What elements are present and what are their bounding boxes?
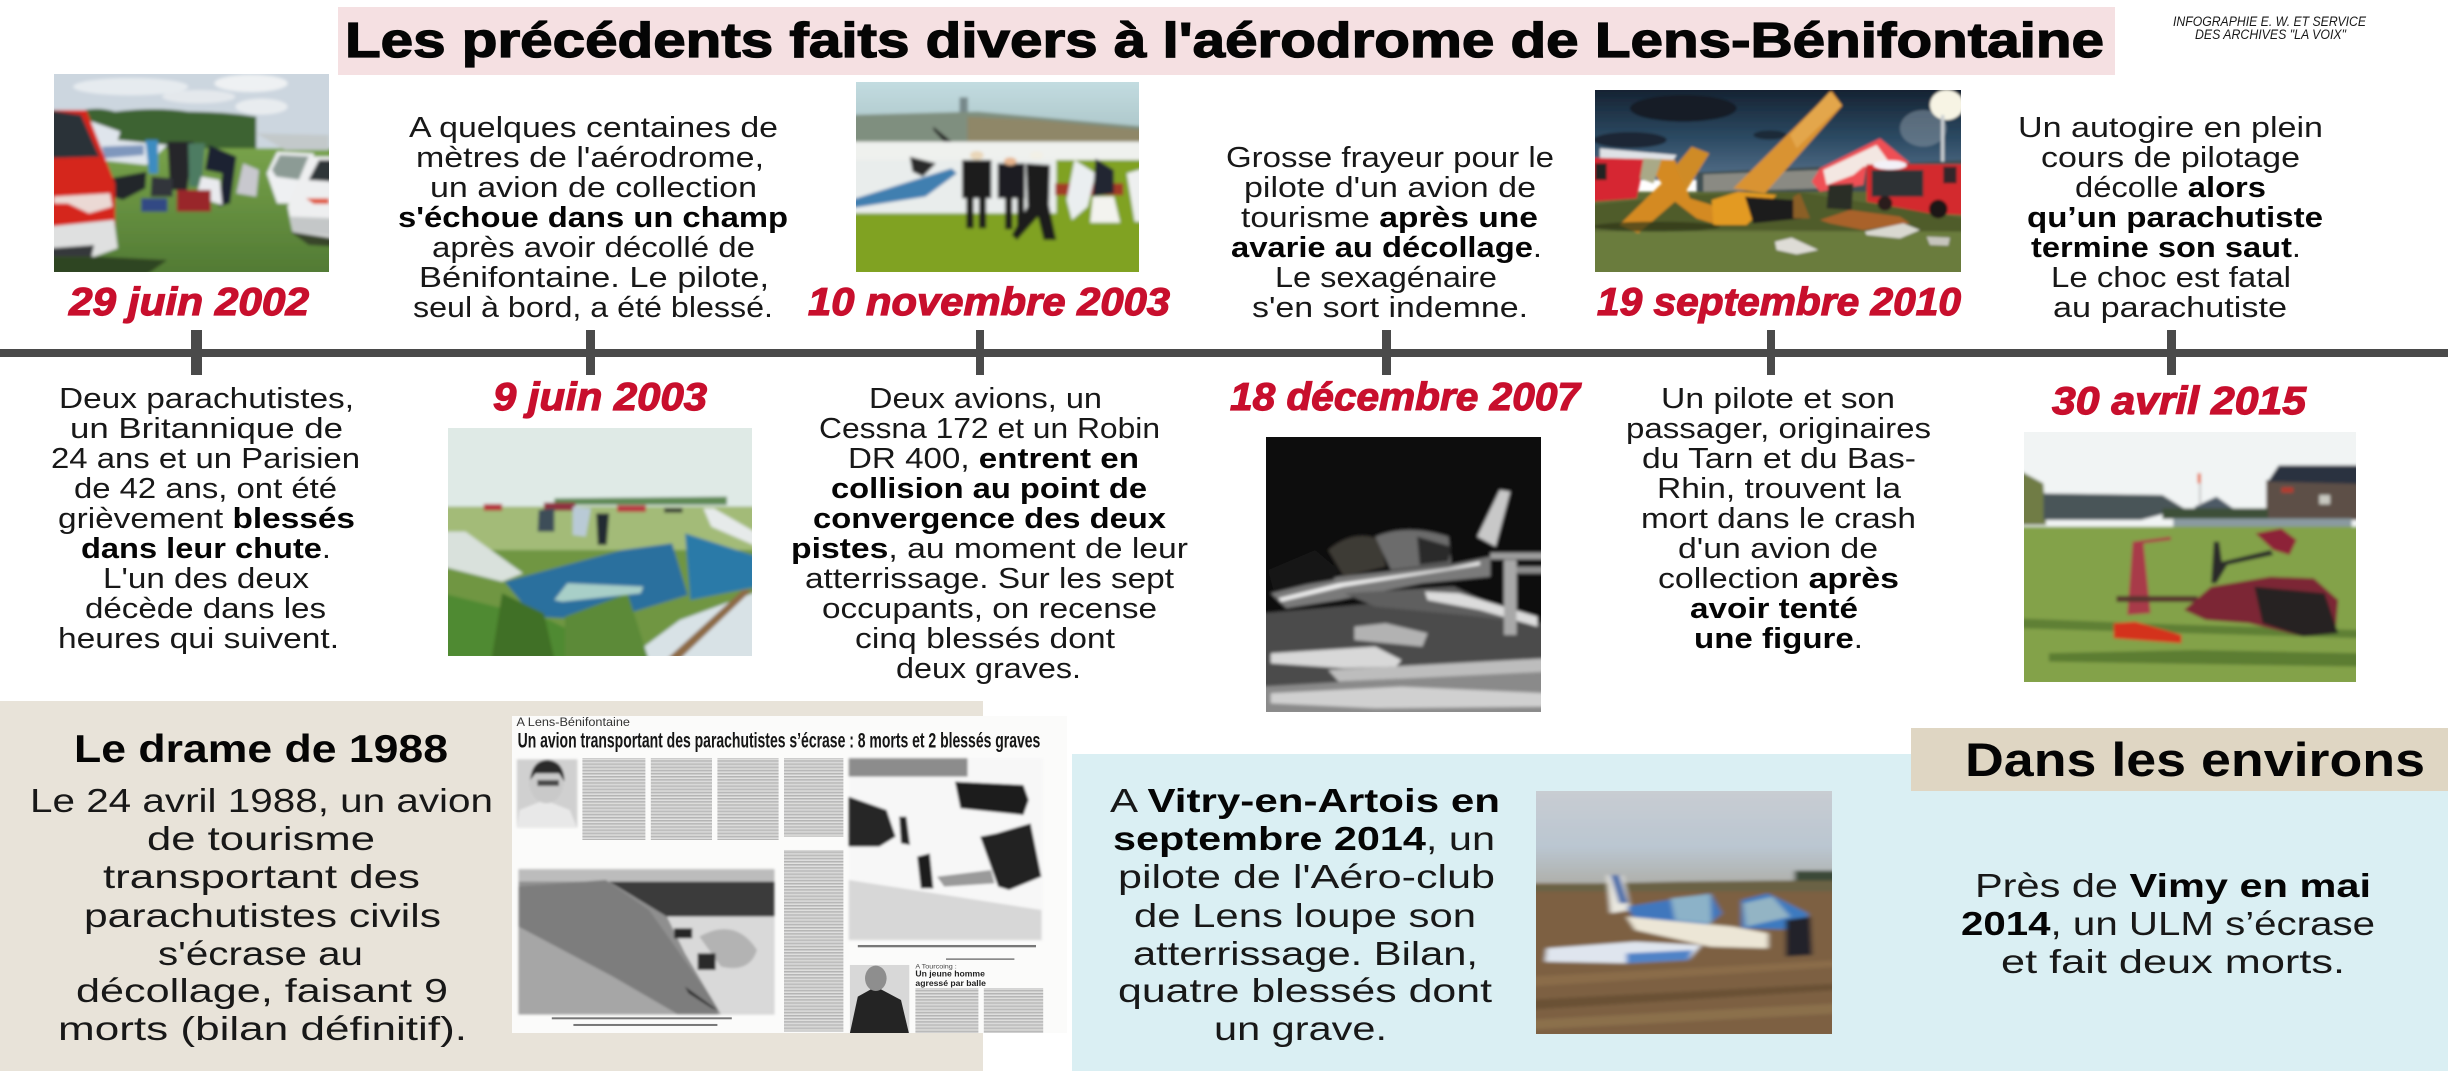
text block: crash collection: d'un avion de xyxy=(1678,533,1878,565)
heading: dans les environs: Dans les environs xyxy=(1965,733,2425,786)
text block: vitry-en-artois: septembre 2014 , un xyxy=(1113,820,1495,857)
text block: parachutistes xyxy=(51,383,360,655)
photo: 9 juin 2003 blue plane in field xyxy=(443,425,757,659)
text block: vitry-en-artois: A Vitry-en-Artois en xyxy=(1110,782,1500,819)
text block: parachutistes: 24 ans et un Parisien xyxy=(51,443,360,475)
text block: parachutistes: L'un des deux xyxy=(103,563,309,595)
text block: crash collection: du Tarn et du Bas- xyxy=(1642,443,1916,475)
text block: autogire: décolle alors xyxy=(2075,172,2266,204)
text block: parachutistes: Deux parachutistes, xyxy=(59,383,354,415)
newspaper portrait xyxy=(517,759,577,828)
credit: INFOGRAPHIE E. W. ET SERVICE xyxy=(2173,14,2367,29)
text block: drame de 1988: transportant des xyxy=(103,858,420,895)
text block: vimy: et fait deux morts. xyxy=(2001,943,2345,980)
text block: drame de 1988: morts (bilan définitif). xyxy=(58,1010,467,1047)
newspaper second article: A Tourcoing : xyxy=(915,964,957,970)
text block: avarie: Le sexagénaire xyxy=(1275,262,1497,294)
text block: avarie: s'en sort indemne. xyxy=(1252,292,1528,324)
text block: parachutistes: décède dans les xyxy=(85,593,326,625)
newspaper headline xyxy=(517,715,1040,752)
text block: collision: Deux avions, un xyxy=(869,383,1102,415)
date: 9 juin 2003: 9 juin 2003 xyxy=(493,376,707,419)
text block: avarie: avarie au décollage . xyxy=(1231,232,1542,264)
photo: 30 avril 2015 autogire wreck xyxy=(2019,428,2361,685)
newspaper clipping xyxy=(512,715,1067,1033)
credit xyxy=(2173,14,2367,42)
text block: autogire: Un autogire en plein xyxy=(2018,112,2323,144)
newspaper quarry photo xyxy=(519,869,774,1014)
text block: autogire: cours de pilotage xyxy=(2041,142,2300,174)
text block: parachutistes: heures qui suivent. xyxy=(58,623,339,655)
text block: vimy: Près de Vimy en mai xyxy=(1975,867,2371,904)
title xyxy=(338,7,2115,75)
newspaper second article: Un jeune homme xyxy=(915,969,985,979)
text block: vimy: 2014 , un ULM s’écrase xyxy=(1961,905,2375,942)
text block: crash collection: Rhin, trouvent la xyxy=(1657,473,1901,505)
text block: crash collection: Un pilote et son xyxy=(1661,383,1895,415)
text block: vitry-en-artois: un grave. xyxy=(1214,1010,1387,1047)
text block: avarie: pilote d'un avion de xyxy=(1244,172,1536,204)
newspaper second article xyxy=(850,964,1043,1033)
text block: crash collection: avoir tenté xyxy=(1690,593,1858,625)
newspaper headline: A Lens-Bénifontaine xyxy=(517,715,630,729)
panel: dans les environs xyxy=(1072,754,2448,1071)
text block: vitry-en-artois: de Lens loupe son xyxy=(1134,897,1476,934)
newspaper rescue photo xyxy=(849,758,1043,941)
title: Les précédents faits divers à l'aérodrome de Lens-Bénifontaine xyxy=(345,14,2104,68)
text block: collision: cinq blessés dont xyxy=(855,623,1115,655)
credit: DES ARCHIVES "LA VOIX" xyxy=(2195,27,2347,42)
photo: 19 septembre 2010 yellow plane xyxy=(1592,87,1964,275)
text block: collision xyxy=(791,383,1189,685)
text block: crash collection: collection après xyxy=(1658,563,1899,595)
heading: le drame de 1988: Le drame de 1988 xyxy=(74,728,448,771)
text block: vitry-en-artois: pilote de l'Aéro-club xyxy=(1118,858,1495,895)
text block: parachutistes: grièvement blessés xyxy=(58,503,355,535)
text block: autogire: Le choc est fatal xyxy=(2051,262,2291,294)
photo: 29 juin 2002 rescuers xyxy=(49,71,334,275)
text block: champ: A quelques centaines de xyxy=(409,112,778,144)
text block: crash collection: une figure . xyxy=(1694,623,1863,655)
text block: drame de 1988: décollage, faisant 9 xyxy=(76,972,448,1009)
text block: collision: pistes , au moment de leur xyxy=(791,533,1189,565)
heading: dans les environs xyxy=(1911,728,2448,791)
text block: champ: Bénifontaine. Le pilote, xyxy=(419,262,769,294)
text block: avarie: Grosse frayeur pour le xyxy=(1226,142,1554,174)
text block: drame de 1988: s'écrase au xyxy=(158,935,363,972)
text block: collision: Cessna 172 et un Robin xyxy=(819,413,1160,445)
text block: autogire: au parachutiste xyxy=(2053,292,2287,324)
text block: vitry-en-artois: atterrissage. Bilan, xyxy=(1133,935,1478,972)
text block: crash collection xyxy=(1626,383,1931,655)
date: 19 septembre 2010: 19 septembre 2010 xyxy=(1597,281,1961,324)
date: 10 novembre 2003: 10 novembre 2003 xyxy=(808,281,1170,324)
text block: drame de 1988: parachutistes civils xyxy=(84,897,441,934)
text block: autogire: termine son saut . xyxy=(2031,232,2301,264)
panel: le drame de 1988 xyxy=(0,701,983,1071)
text block: champ: seul à bord, a été blessé. xyxy=(413,292,773,324)
text block: parachutistes: un Britannique de xyxy=(70,413,343,445)
text block: drame de 1988 xyxy=(30,782,493,1047)
date: 30 avril 2015: 30 avril 2015 xyxy=(2052,380,2307,423)
photo: vitry plane in ploughed field xyxy=(1527,788,1841,1037)
text block: parachutistes: dans leur chute . xyxy=(81,533,331,565)
text block: vimy xyxy=(1961,867,2375,980)
text block: parachutistes: de 42 ans, ont été xyxy=(74,473,337,505)
text block: collision: atterrissage. Sur les sept xyxy=(805,563,1174,595)
text block: autogire: qu’un parachutiste xyxy=(2027,202,2323,234)
text block: vitry-en-artois xyxy=(1110,782,1500,1047)
text block: vitry-en-artois: quatre blessés dont xyxy=(1118,972,1492,1009)
text block: drame de 1988: Le 24 avril 1988, un avion xyxy=(30,782,493,819)
text block: champ: mètres de l'aérodrome, xyxy=(416,142,764,174)
text block: champ: un avion de collection xyxy=(430,172,757,204)
date: 18 decembre 2007: 18 décembre 2007 xyxy=(1230,376,1582,419)
text block: champ: après avoir décollé de xyxy=(432,232,755,264)
timeline xyxy=(0,330,2448,375)
text block: crash collection: passager, originaires xyxy=(1626,413,1931,445)
text block: crash collection: mort dans le crash xyxy=(1641,503,1916,535)
photo: 18 decembre 2007 night crash xyxy=(1261,434,1546,715)
text block: autogire xyxy=(2018,112,2323,324)
text block: collision: DR 400, entrent en xyxy=(848,443,1139,475)
text block: champ xyxy=(398,112,788,324)
text block: avarie: tourisme après une xyxy=(1241,202,1538,234)
text block: champ: s'échoue dans un champ xyxy=(398,202,788,234)
text block: collision: convergence des deux xyxy=(813,503,1166,535)
date: 29 juin 2002: 29 juin 2002 xyxy=(68,281,309,324)
text block: collision: deux graves. xyxy=(896,653,1081,685)
text block: drame de 1988: de tourisme xyxy=(147,820,375,857)
text block: collision: collision au point de xyxy=(831,473,1147,505)
text block: avarie xyxy=(1226,142,1554,324)
newspaper second article: agressé par balle xyxy=(915,978,986,988)
photo: 10 novembre 2003 firefighters xyxy=(851,79,1144,275)
text block: collision: occupants, on recense xyxy=(822,593,1157,625)
newspaper headline: Un avion transportant des parachutistes s’écrase : 8 morts et 2 blessés graves xyxy=(518,728,1040,752)
